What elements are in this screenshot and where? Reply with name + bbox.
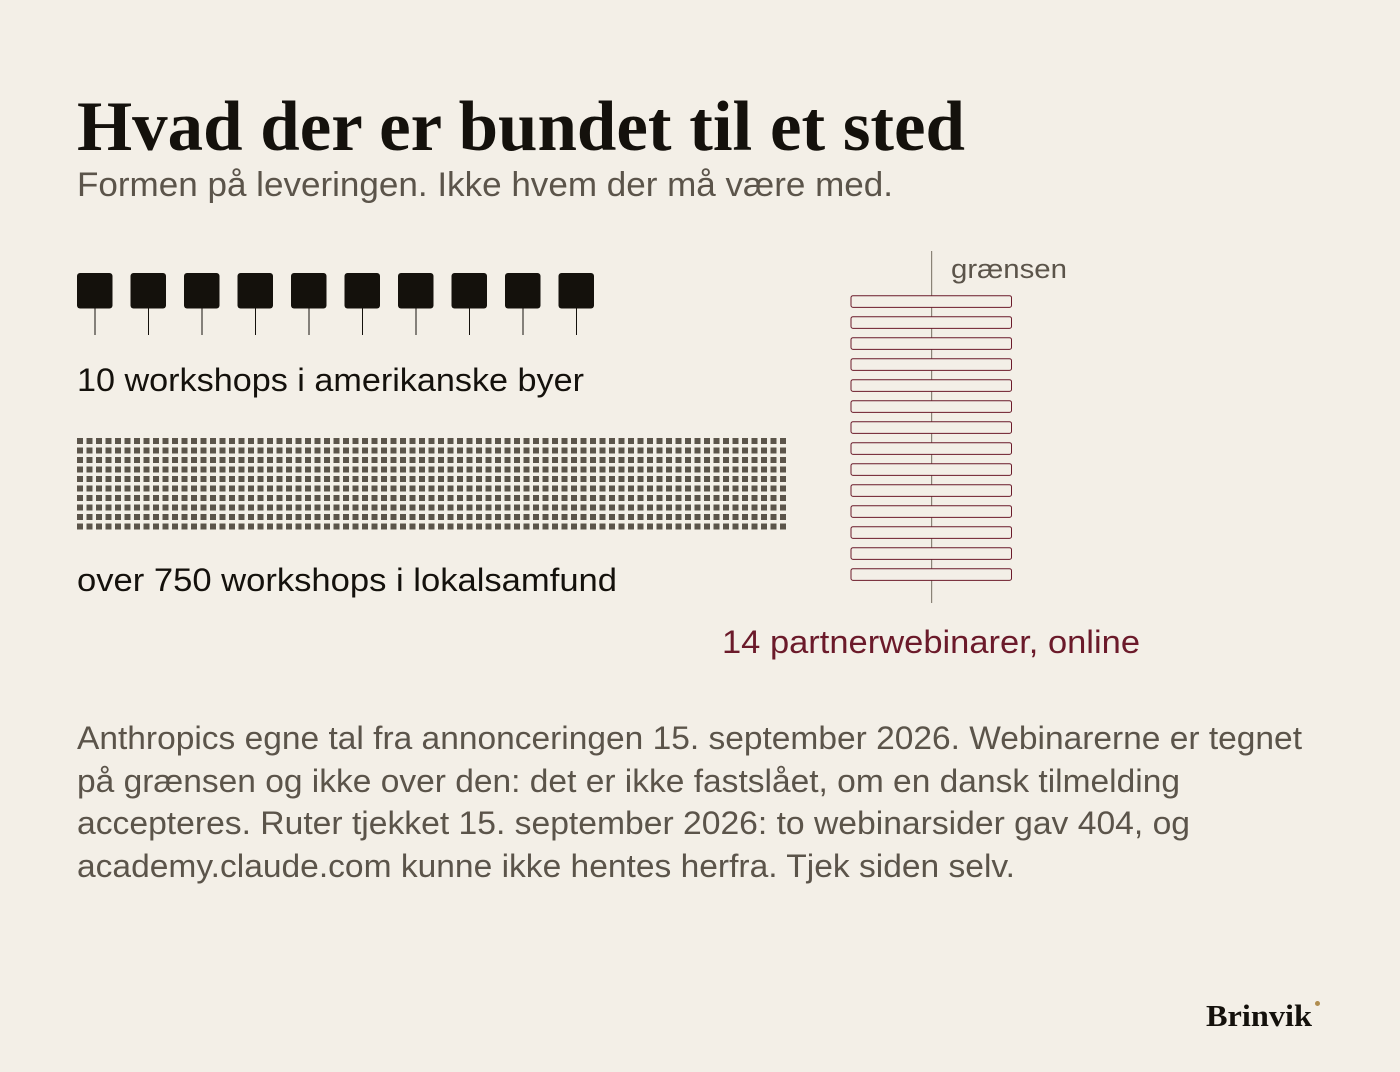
body text: accepteres. Ruter tjekket 15. september 2026: to webinarsider gav 404, og [77, 805, 1190, 841]
logo dot [1315, 1001, 1320, 1006]
body text: på grænsen og ikke over den: det er ikke fastslået, om en dansk tilmelding [77, 763, 1180, 799]
chart: 750 workshops as dot grid [77, 438, 786, 530]
border line [931, 251, 932, 603]
chart: 10 workshops as pins [77, 273, 594, 335]
label: grænsen: grænsen [951, 254, 1067, 284]
label: 10 workshops: 10 workshops i amerikanske byer [77, 362, 584, 398]
label: 750 workshops: over 750 workshops i lokalsamfund [77, 562, 617, 598]
title: Hvad der er bundet til et sted [77, 88, 965, 166]
body text: Anthropics egne tal fra annonceringen 15. september 2026. Webinarerne er tegnet [77, 720, 1302, 756]
label: 14 webinars: 14 partnerwebinarer, online [722, 624, 1140, 660]
webinar bars [851, 296, 1012, 580]
body text: academy.claude.com kunne ikke hentes herfra. Tjek siden selv. [77, 848, 1015, 884]
subtitle: Formen på leveringen. Ikke hvem der må være med. [77, 166, 893, 204]
body text [77, 720, 1302, 884]
logo: Brinvik: Brinvik [1206, 998, 1313, 1033]
chart: 14 webinars on the border [851, 251, 1012, 603]
